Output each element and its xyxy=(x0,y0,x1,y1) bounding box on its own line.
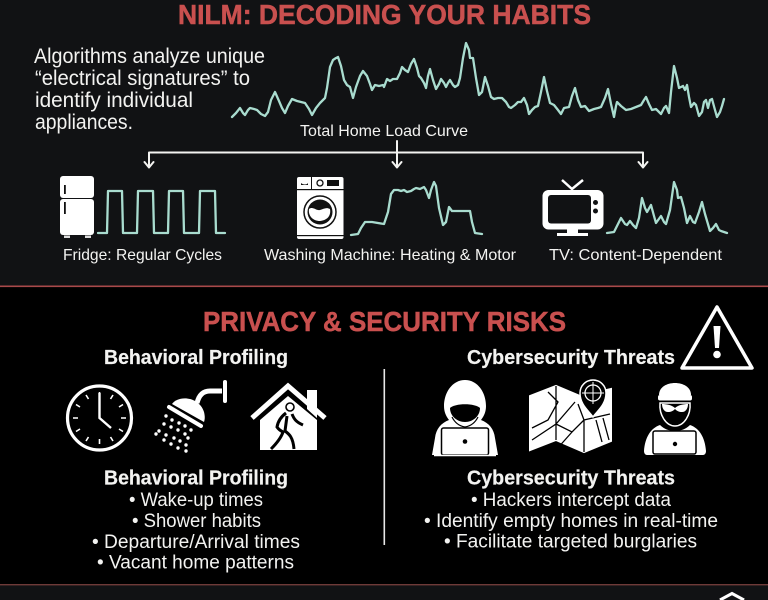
icon: cropped house at bottom edge xyxy=(720,594,744,600)
label: total home load curve: Total Home Load Curve xyxy=(300,123,468,140)
icon: TV xyxy=(542,180,604,236)
chart: washing machine signature xyxy=(351,182,482,235)
chart: fridge signature xyxy=(98,191,225,233)
icon: house with person leaving xyxy=(252,386,325,450)
caption: washing machine: Washing Machine: Heating & Motor xyxy=(264,247,517,264)
heading: cybersecurity threats list: Cybersecurity Threats xyxy=(467,466,675,490)
text block: algorithm description xyxy=(34,45,265,134)
icon: washing machine xyxy=(297,177,344,239)
text block: algorithm description: Algorithms analyze unique xyxy=(34,45,265,68)
panel: NILM decoding xyxy=(34,0,727,264)
caption: TV: TV: Content-Dependent xyxy=(549,247,723,264)
list: behaviors revealed: • Vacant home patterns xyxy=(97,552,294,574)
icon: fridge xyxy=(60,176,94,238)
column: behavioral profiling xyxy=(68,346,325,574)
chart: TV signature xyxy=(607,182,727,233)
text block: algorithm description: “electrical signatures” to xyxy=(35,67,250,90)
heading: cybersecurity threats: Cybersecurity Threats xyxy=(467,346,675,369)
text block: algorithm description: identify individual xyxy=(35,89,193,112)
arrows: load splits to three appliances xyxy=(144,141,648,168)
icon: masked burglar with laptop xyxy=(644,383,706,455)
list: behaviors revealed xyxy=(92,490,300,574)
text block: algorithm description: appliances. xyxy=(35,111,133,134)
chart: total home load curve xyxy=(232,43,724,117)
list: threats: • Facilitate targeted burglaries xyxy=(444,532,697,552)
list: threats: • Identify empty homes in real-time xyxy=(424,511,718,532)
icon: clock xyxy=(68,386,132,450)
panel: privacy and security risks xyxy=(68,306,752,574)
heading: behavioral profiling: Behavioral Profiling xyxy=(104,346,288,369)
list: behaviors revealed: • Shower habits xyxy=(132,511,261,532)
icon: shower xyxy=(154,382,225,453)
list: threats: • Hackers intercept data xyxy=(471,490,671,511)
appliance: washing machine xyxy=(264,177,517,264)
icon: hooded hacker with laptop xyxy=(432,380,498,456)
icon: map with target pin xyxy=(530,380,611,452)
list: threats xyxy=(424,490,718,552)
list: behaviors revealed: • Wake-up times xyxy=(129,490,263,511)
icon: warning triangle xyxy=(682,307,752,368)
heading: behavioral profiling list: Behavioral Profiling xyxy=(104,466,288,490)
column: cybersecurity threats xyxy=(424,346,718,552)
appliance: fridge xyxy=(60,176,225,264)
caption: fridge: Fridge: Regular Cycles xyxy=(63,247,222,264)
list: behaviors revealed: • Departure/Arrival times xyxy=(92,532,300,553)
heading: privacy and security risks: PRIVACY & SECURITY RISKS xyxy=(203,306,566,337)
appliance: TV xyxy=(542,180,727,264)
